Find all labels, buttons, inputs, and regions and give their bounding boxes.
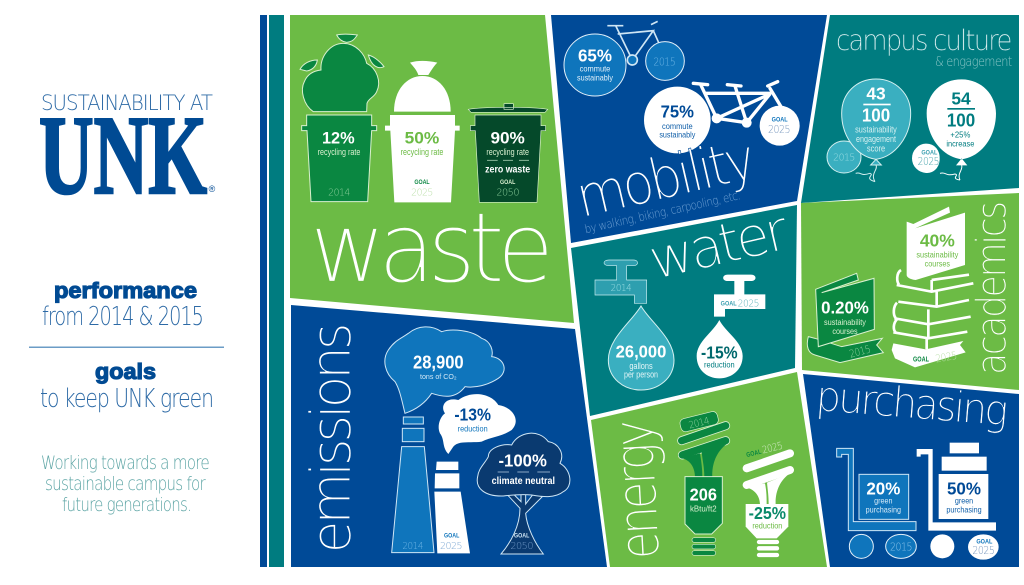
- icon: tree 2050: climate neutral: [492, 476, 555, 487]
- icon: bin 2050: [468, 104, 548, 202]
- icon: cart 2025: green: [955, 495, 973, 505]
- icon: balloon 2025: +25%: [950, 130, 971, 140]
- icon: book 2015: 0.20%: [821, 297, 869, 317]
- icon: cart 2025: 2025: [972, 544, 994, 557]
- icon: balloon 2025: 54: [951, 88, 971, 108]
- icon: chimney 2025: 2025: [440, 541, 462, 552]
- icon: cart 2025: 50%: [947, 478, 981, 498]
- icon: faucet 2025: GOAL: [721, 301, 737, 308]
- icon: cart 2015: purchasing: [866, 504, 901, 514]
- icon: bin 2050: recycling rate: [486, 147, 529, 157]
- icon: balloon 2015: 43: [866, 83, 886, 103]
- icon: book stack 2025: [892, 207, 973, 367]
- icon: bin 2025: GOAL: [414, 179, 430, 186]
- icon: book stack 2025: courses: [925, 259, 951, 269]
- icon: bulb 2014: kBtu/ft2: [690, 504, 717, 514]
- icon: faucet 2025: 2025: [738, 299, 759, 310]
- icon: bin 2014: recycling rate: [318, 147, 360, 157]
- icon: bulb 2025: 2025: [761, 441, 784, 456]
- icon: drop 2025: reduction: [704, 359, 735, 369]
- icon: tandem bicycle 2025: commute: [662, 121, 693, 131]
- icon: book stack 2025: 2025: [934, 349, 958, 365]
- icon: tandem bicycle 2025: sustainably: [659, 130, 696, 140]
- icon: bin 2050: zero waste: [485, 165, 531, 176]
- icon: bicycle 2015: 2015: [653, 56, 675, 69]
- icon: faucet 2014: [595, 260, 647, 303]
- icon: tandem bicycle 2025: GOAL: [772, 117, 788, 124]
- panel: water: [571, 198, 797, 416]
- text: from 2014 and 2015: from 2014 & 2015: [42, 302, 203, 332]
- icon: cart 2015: 2015: [890, 540, 912, 553]
- icon: bulb 2025: -25%: [749, 503, 786, 523]
- icon: balloon 2015: 2015: [833, 153, 855, 164]
- icon: bin 2025: [385, 61, 460, 202]
- icon: drop 2014: gallons: [629, 361, 653, 371]
- icon: tree 2050: GOAL: [514, 532, 529, 539]
- icon: cart 2025: purchasing: [946, 504, 982, 514]
- icon: tandem bicycle 2025: 2025: [768, 123, 790, 136]
- panel: energy: [591, 372, 827, 567]
- icon: bulb 2025: GOAL: [746, 449, 762, 459]
- icon: cart 2015: green: [874, 495, 893, 505]
- divider: [29, 346, 224, 348]
- icon: cloud 2014: 28,900: [413, 351, 464, 372]
- subtitle: by walking: by walking, biking, carpooling, etc.: [583, 188, 741, 236]
- panel title: academics: academics: [968, 203, 1016, 375]
- icon: tandem bicycle 2025: [644, 82, 800, 153]
- icon: cloud 2025: -13%: [454, 405, 491, 425]
- icon: book 2015: [807, 273, 883, 363]
- panel: academics: [801, 193, 1019, 390]
- icon: tandem bicycle 2025: 75%: [661, 101, 694, 121]
- panel title: campus culture: campus culture: [836, 23, 1011, 57]
- icon: book stack 2025: GOAL: [913, 354, 929, 363]
- icon: balloon 2025: GOAL: [921, 150, 937, 157]
- icon: balloon 2025: [912, 79, 996, 180]
- icon: faucet 2025: [714, 275, 765, 317]
- icon: drop 2025: [697, 320, 743, 378]
- text: to keep UNK green: to keep UNK green: [40, 384, 213, 414]
- icon: book 2015: 2015: [848, 343, 872, 361]
- icon: balloon 2025: increase: [946, 139, 974, 149]
- icon: balloon 2015: sustainability: [855, 125, 897, 135]
- icon: balloon 2015: [827, 79, 911, 182]
- icon: bicycle 2015: [564, 21, 684, 96]
- icon: chimney 2014: [392, 417, 434, 553]
- panel: waste: [290, 15, 574, 323]
- icon: bulb 2025: reduction: [752, 521, 783, 531]
- text: working towards: future generations.: [62, 494, 191, 516]
- icon: bicycle 2015: sustainably: [577, 73, 614, 83]
- icon: cloud 2014: [385, 327, 504, 413]
- icon: bin 2025: 2025: [411, 188, 433, 199]
- text: working towards: [41, 452, 209, 516]
- panel title: waste: waste: [310, 192, 548, 305]
- text: working towards: sustainable campus for: [45, 473, 206, 495]
- panel title: mobility: mobility: [570, 126, 760, 231]
- icon: drop 2014: per person: [624, 370, 658, 380]
- icon: balloon 2025: 100: [947, 110, 975, 131]
- icon: cart 2025: [917, 443, 999, 560]
- icon: bulb 2014: 206: [690, 485, 717, 505]
- icon: drop 2014: [608, 306, 674, 390]
- icon: book stack 2025: sustainability: [916, 250, 959, 260]
- icon: drop 2014: 26,000: [616, 341, 666, 361]
- icon: book 2015: sustainability: [824, 317, 867, 327]
- icon: cart 2025: GOAL: [976, 538, 992, 545]
- icon: bulb 2014: 2014: [688, 416, 711, 431]
- icon: bin 2014: [300, 34, 384, 202]
- icon: cloud 2014: tons of CO₂: [420, 372, 457, 381]
- panel title: water: water: [643, 198, 795, 292]
- logo registered mark: ®: [209, 184, 216, 194]
- icon: book 2015: courses: [832, 326, 858, 336]
- icon: cloud 2025: reduction: [458, 424, 488, 434]
- logo: UNK: UNK: [39, 94, 207, 218]
- icon: bin 2025: recycling rate: [401, 147, 443, 157]
- panel: mobility: [551, 15, 827, 243]
- icon: chimney 2014: 2014: [402, 541, 423, 552]
- icon: chimney 2025: [434, 462, 470, 553]
- panel title: energy: energy: [601, 420, 672, 561]
- icon: book stack 2025: 40%: [920, 231, 955, 251]
- icon: balloon 2015: engagement: [856, 134, 896, 144]
- panel title: purchasing: purchasing: [814, 371, 1008, 435]
- icon: bin 2025: 50%: [405, 128, 440, 147]
- icon: cart 2015: 20%: [866, 478, 900, 498]
- subtitle: engagement: & engagement: [935, 55, 1012, 70]
- panel: emissions: [291, 305, 607, 567]
- heading: performance: performance: [54, 278, 197, 303]
- text: working towards: Working towards a more: [41, 452, 209, 474]
- icon: chimney 2025: GOAL: [444, 532, 459, 539]
- left column: intro: [29, 91, 224, 516]
- icon: bulb 2025: [745, 441, 790, 555]
- icon: bulb 2014: [679, 411, 727, 553]
- icon: bin 2014: 2014: [328, 188, 350, 199]
- icon: bin 2050: 90%: [490, 128, 525, 147]
- icon: tree 2050: [477, 433, 570, 554]
- panel title: emissions: emissions: [299, 326, 363, 553]
- icon: balloon 2025: 2025: [918, 155, 939, 168]
- icon: cart 2015: [837, 448, 916, 558]
- heading: sustainability at: SUSTAINABILITY AT: [41, 91, 213, 115]
- decorative stripes: [260, 15, 284, 567]
- icon: balloon 2015: score: [867, 143, 885, 153]
- icon: bicycle 2015: 65%: [578, 46, 612, 66]
- icon: faucet 2014: 2014: [611, 283, 631, 294]
- icon: cloud 2025: [439, 394, 516, 454]
- icon: balloon 2015: 100: [862, 105, 890, 126]
- icon: tree 2050: -100%: [498, 451, 547, 471]
- icon: bin 2050: 2050: [496, 188, 519, 199]
- icon: bicycle 2015: commute: [580, 64, 610, 74]
- panel: purchasing: [803, 371, 1019, 567]
- panel: campus culture: [801, 15, 1019, 203]
- icon: bin 2050: GOAL: [500, 179, 515, 186]
- heading: goals: goals: [95, 359, 156, 384]
- icon: tree 2050: 2050: [510, 541, 533, 552]
- icon: drop 2025: -15%: [701, 342, 738, 362]
- icon: bin 2014: 12%: [322, 128, 355, 147]
